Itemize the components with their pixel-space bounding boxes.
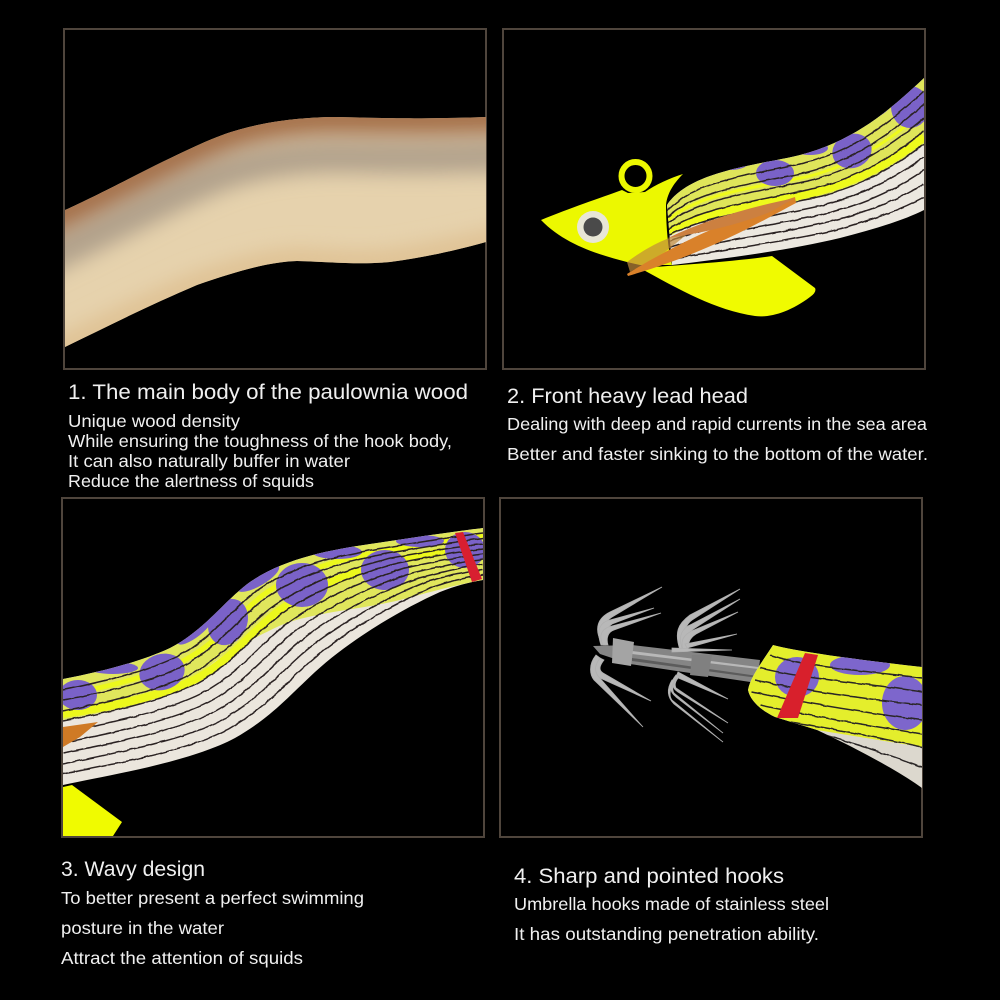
caption 2 text [507,414,928,464]
wood base shape [60,110,490,350]
caption 3 text: posture in the water [61,918,224,938]
caption 3 text: To better present a perfect swimming [61,888,364,908]
knitted tail body [745,640,928,790]
orange feather [627,197,796,276]
rear umbrella hooks [668,589,740,742]
white cloth [60,520,485,790]
caption 3 heading: 3. Wavy design [61,857,205,881]
caption 3 [61,857,364,968]
red binding [777,653,818,718]
panel frame [500,498,922,837]
caption 4 text: Umbrella hooks made of stainless steel [514,894,829,914]
white cloth [667,78,924,265]
wood shading bands [65,117,486,347]
caption 1 text: Unique wood density [68,411,240,431]
caption 2 text: Dealing with deep and rapid currents in the sea area [507,414,927,434]
caption 3 text: Attract the attention of squids [61,948,303,968]
caption 4 heading: 4. Sharp and pointed hooks [514,864,784,888]
caption 4 text: It has outstanding penetration ability. [514,924,819,944]
caption 1 text [68,411,452,491]
hook shaft [593,638,760,683]
yellow cloth [667,78,924,235]
panel 4: stainless steel hooks [500,498,928,837]
caption 4 text [514,894,829,944]
caption 1 heading: 1. The main body of the paulownia wood [68,380,468,404]
dark knit lines [668,91,924,259]
purple dots [775,655,928,730]
panel frame [64,29,486,369]
panel 3: wavy body [59,498,485,837]
caption 2 [507,384,928,464]
purple dots [59,532,485,710]
yellow cloth [748,645,922,747]
dark knit lines [752,655,922,767]
panel 1: paulownia wood body [63,28,487,370]
caption 2 text: Better and faster sinking to the bottom of the water. [507,444,928,464]
dark knit lines [63,533,483,774]
attachment ring [622,162,650,190]
bright yellow stripes [668,111,924,232]
caption 1 [68,380,468,491]
caption 2 heading: 2. Front heavy lead head [507,384,748,408]
knitted wavy body [59,520,485,790]
caption 1 text: While ensuring the toughness of the hook body, [68,431,452,451]
eye [577,211,609,243]
panel 2: lead head [503,29,930,369]
wood body [65,117,486,347]
white cloth [745,640,925,790]
purple dots [730,86,924,186]
yellow fin fragment [63,785,122,836]
panel frame [503,29,925,369]
lead head fin [640,256,815,316]
caption 4 [514,864,829,944]
front umbrella hooks [590,587,662,727]
yellow lead head [541,174,683,265]
caption 1 text: It can also naturally buffer in water [68,451,350,471]
panel frame [62,498,484,837]
bright yellow stripes [63,535,483,714]
red binding [455,532,482,582]
knitted body [667,78,924,265]
caption 3 text [61,888,364,968]
orange feather tip [63,722,98,747]
caption 1 text: Reduce the alertness of squids [68,471,314,491]
yellow cloth [63,528,483,720]
